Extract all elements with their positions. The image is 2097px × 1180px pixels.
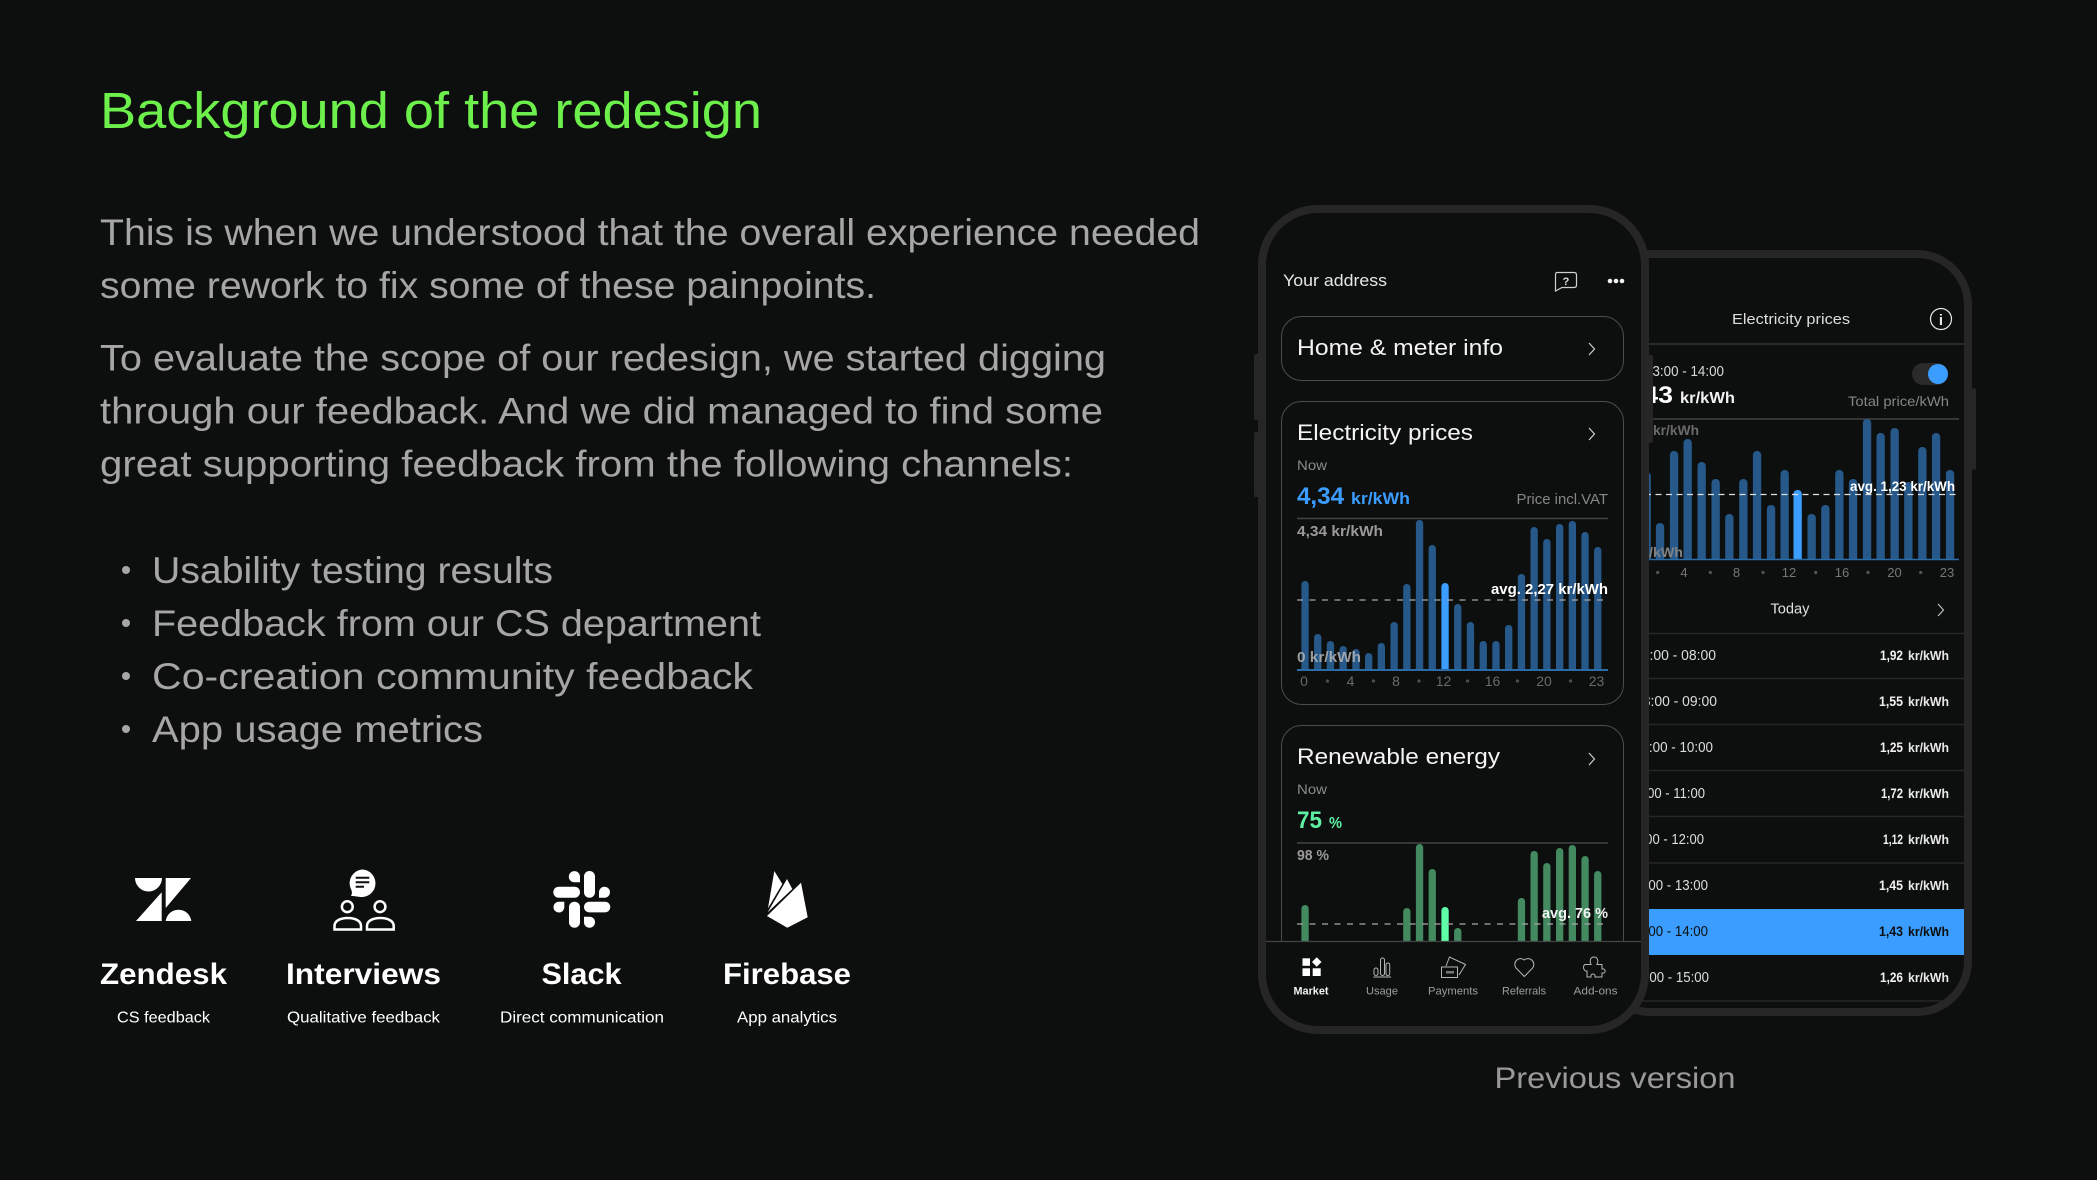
- channel: Zendesk: [100, 878, 227, 1026]
- toggle: [1912, 363, 1948, 385]
- highlighted row: [1649, 909, 1964, 955]
- icon: Zendesk logo: [135, 878, 191, 921]
- bar chart: electricity price by hour: 20: [1536, 673, 1552, 689]
- bar chart: electricity price by hour: 8: [1392, 673, 1400, 689]
- icon: help bubble: [1556, 272, 1576, 291]
- bar chart: electricity price by hour: 12: [1436, 673, 1451, 689]
- channel: Firebase: [723, 871, 851, 1026]
- hourly price table: 10:00 - 11:00: [1629, 786, 1705, 802]
- bar chart: hourly prices: [1649, 419, 1959, 577]
- title: Background of the redesign: [100, 82, 762, 139]
- caption: previous version: Previous version: [1494, 1062, 1736, 1095]
- icon: more dots: [1608, 279, 1624, 283]
- bar chart: electricity price by hour: 23: [1589, 673, 1604, 689]
- bar chart: hourly prices: avg. 1,23 kr/kWh: [1850, 478, 1955, 494]
- bullet list of feedback channels: Usability testing results: [152, 550, 553, 591]
- current price summary: Total price/kWh: [1848, 393, 1949, 409]
- bar chart: electricity price by hour: 16: [1485, 673, 1500, 689]
- bar chart: electricity price by hour: 4: [1347, 673, 1355, 689]
- current price summary: [1653, 366, 1948, 409]
- bar chart: hourly prices: kr/kWh: [1653, 422, 1699, 438]
- screen header: i: [1939, 312, 1943, 329]
- bar chart: hourly prices: 4: [1680, 565, 1688, 580]
- hourly price table: 13:00 - 14:00: [1630, 924, 1708, 940]
- icon: referrals: [1515, 959, 1534, 976]
- hourly price table: kr/kWh: [1908, 695, 1949, 709]
- channel: Interviews: Qualitative feedback: [287, 1010, 441, 1026]
- phone frame: [1599, 254, 1976, 1012]
- hourly price table: 08:00 - 09:00: [1635, 694, 1717, 710]
- card: electricity prices: [1282, 402, 1624, 704]
- intro text block: To evaluate the scope of our redesign, we started digging: [100, 338, 1106, 378]
- hourly price table: 14:00 - 15:00: [1631, 970, 1709, 986]
- card: renewable energy: Renewable energy: [1297, 744, 1501, 769]
- phone: market home screen (front): [1254, 209, 1653, 1030]
- bar chart: hourly prices: 16: [1835, 565, 1849, 580]
- hourly price table: kr/kWh: [1908, 787, 1949, 801]
- app header: Your address: [1283, 272, 1387, 290]
- current price summary: 13:00 - 14:00: [1645, 364, 1724, 380]
- icon: market: [1302, 957, 1322, 976]
- icon: add-ons: [1584, 957, 1605, 977]
- card: electricity prices: Electricity prices: [1297, 420, 1473, 445]
- hourly price table: 1,25: [1880, 739, 1903, 755]
- app header: [1283, 272, 1624, 291]
- hourly price table: kr/kWh: [1908, 879, 1949, 893]
- bar chart: hourly prices: 12: [1782, 565, 1796, 580]
- channel: Interviews: Interviews: [286, 958, 441, 991]
- hourly price table: 07:00 - 08:00: [1634, 648, 1716, 664]
- bar chart: electricity price by hour: avg. 2,27 kr/kWh: [1491, 581, 1608, 598]
- phone: electricity prices detail screen (back): [1599, 254, 1976, 1012]
- bar chart: hourly prices: 8: [1733, 565, 1740, 580]
- channel: Slack: Direct communication: [500, 1010, 664, 1026]
- icon: help bubble: ?: [1563, 276, 1570, 288]
- channel: Slack: [500, 871, 664, 1026]
- channel: Slack: Slack: [542, 958, 622, 991]
- bar chart: hourly prices: /kWh: [1649, 544, 1683, 560]
- card: home and meter info: Home & meter info: [1297, 335, 1503, 360]
- day selector: Today: [1770, 602, 1810, 618]
- icon: interviews people with speech bubble: [334, 870, 394, 930]
- hourly price table: kr/kWh: [1908, 971, 1949, 985]
- channel: Zendesk: CS feedback: [117, 1010, 211, 1026]
- card: electricity prices: Now: [1297, 457, 1328, 473]
- bar chart: hourly prices: 23: [1940, 565, 1954, 580]
- hourly price table: 1,45: [1879, 877, 1903, 893]
- bar chart: renewable share by hour: avg. 76 %: [1542, 905, 1608, 922]
- hourly price table: kr/kWh: [1908, 649, 1949, 663]
- navigation labels: Add-ons: [1574, 986, 1618, 998]
- channel: Interviews: [286, 870, 441, 1026]
- screen header: Electricity prices: [1732, 311, 1850, 328]
- navigation labels: Market: [1294, 986, 1329, 998]
- hourly price table: 1,12: [1883, 831, 1903, 847]
- hourly price table: 09:00 - 10:00: [1634, 740, 1713, 756]
- hourly price table: [1642, 632, 1964, 1002]
- hourly price table: 1,26: [1880, 969, 1903, 985]
- hourly price table: 11:00 - 12:00: [1628, 832, 1704, 848]
- icon: usage: [1374, 958, 1391, 977]
- channel: Firebase: App analytics: [737, 1010, 837, 1026]
- screen contents: [1642, 308, 1964, 1002]
- card: renewable energy: [1282, 726, 1624, 963]
- intro text block: some rework to fix some of these painpoints.: [100, 265, 876, 306]
- icon: Firebase logo: [767, 871, 808, 928]
- channel: Firebase: Firebase: [723, 958, 851, 991]
- current price summary: kr/kWh: [1680, 390, 1735, 407]
- bar chart: renewable share by hour: [1297, 844, 1608, 941]
- icon: payments: [1442, 957, 1466, 978]
- bullet list of feedback channels: Co-creation community feedback: [152, 656, 754, 697]
- hourly price table: kr/kWh: [1908, 833, 1949, 847]
- bar chart: electricity price by hour: 4,34 kr/kWh: [1297, 523, 1383, 540]
- intro text block: through our feedback. And we did managed to find some: [100, 390, 1103, 432]
- hourly price table: 1,55: [1879, 693, 1903, 709]
- card: home and meter info: [1282, 316, 1624, 380]
- channel: Zendesk: Zendesk: [100, 958, 227, 991]
- hourly price table: kr/kWh: [1908, 925, 1949, 939]
- phone frame: [1254, 209, 1653, 1030]
- bar chart: electricity price by hour: 0: [1300, 673, 1308, 689]
- hourly price table: 1,72: [1881, 785, 1903, 801]
- bar chart: electricity price by hour: 0 kr/kWh: [1297, 649, 1361, 666]
- icon: Slack logo: [553, 871, 610, 928]
- card: renewable energy: Now: [1297, 781, 1328, 797]
- card: renewable energy: %: [1329, 815, 1342, 832]
- intro text block: [100, 212, 1200, 484]
- card: electricity prices: 4,34: [1297, 483, 1345, 510]
- hourly price table: 1,43: [1879, 923, 1903, 939]
- navigation labels: [1294, 986, 1618, 998]
- intro text block: great supporting feedback from the following channels:: [100, 444, 1073, 484]
- bar chart: hourly prices: 20: [1887, 565, 1902, 580]
- screen header: [1603, 308, 1964, 344]
- bar chart: renewable share by hour: 98 %: [1297, 847, 1329, 864]
- bullet list of feedback channels: [122, 550, 762, 750]
- hourly price table: kr/kWh: [1908, 741, 1949, 755]
- bar chart: electricity price by hour: [1297, 520, 1608, 693]
- bullet list of feedback channels: App usage metrics: [152, 709, 483, 750]
- navigation labels: Payments: [1428, 986, 1478, 998]
- navigation labels: Referrals: [1502, 986, 1546, 998]
- card: electricity prices: kr/kWh: [1351, 489, 1410, 508]
- hourly price table: 12:00 - 13:00: [1630, 878, 1708, 894]
- bullet list of feedback channels: Feedback from our CS department: [152, 603, 762, 644]
- day selector: [1770, 602, 1944, 616]
- bottom navigation bar: [1266, 942, 1641, 998]
- navigation labels: Usage: [1366, 986, 1398, 998]
- hourly price table: 1,92: [1880, 647, 1903, 663]
- intro text block: This is when we understood that the overall experience needed: [100, 212, 1200, 253]
- card: renewable energy: 75: [1297, 807, 1322, 834]
- current price summary: 1,43: [1621, 382, 1673, 409]
- card: electricity prices: Price incl.VAT: [1516, 492, 1608, 508]
